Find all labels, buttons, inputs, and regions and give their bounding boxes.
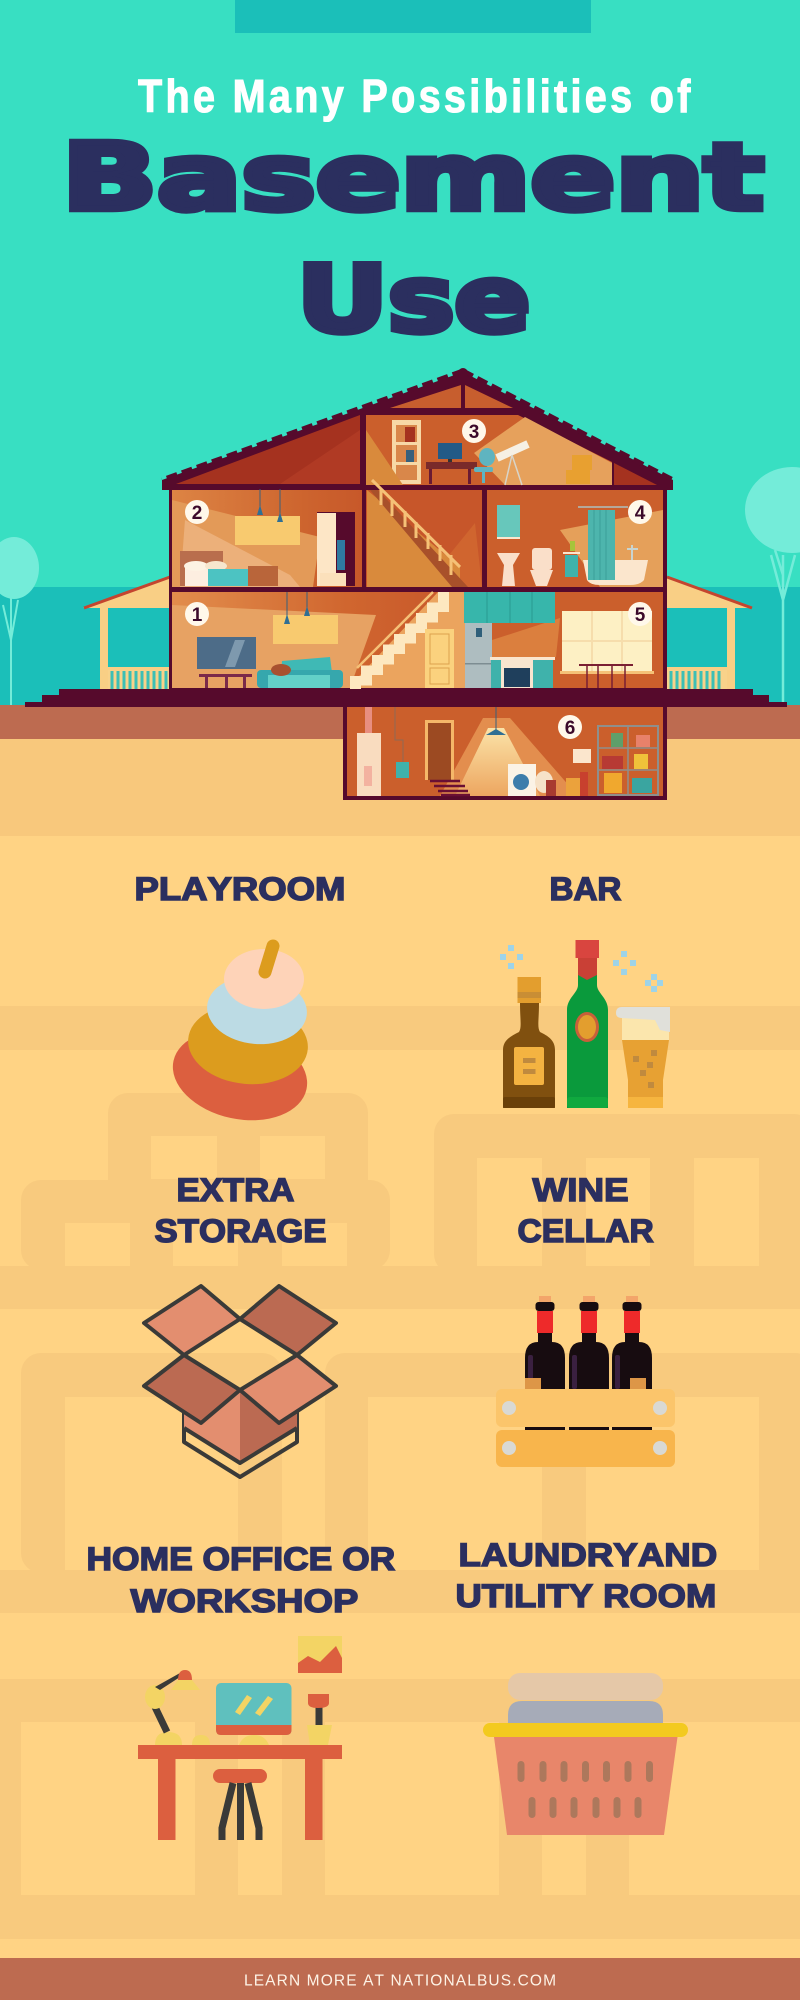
desk lamp [145,1670,200,1745]
stool [213,1769,267,1840]
water horizon [0,587,800,707]
wall picture [235,516,300,545]
ground strip [0,705,800,739]
section: home office or workshop [86,1542,395,1840]
number badge 4: 4 [635,503,646,524]
window [560,611,654,674]
porch left [83,577,170,689]
heading: WINE [532,1173,629,1208]
section: wine cellar [496,1173,675,1467]
desk and monitor [426,443,477,484]
wall picture [273,615,338,644]
number badge 6 [558,715,582,739]
icon: laundry basket [483,1673,688,1835]
title word: Use: Use [297,247,530,353]
heading: CELLAR [518,1213,654,1249]
top accent bar [235,0,591,33]
green bottle [567,940,608,1108]
counter and oven [490,657,555,688]
number badge 5 [628,602,652,626]
title [62,71,764,353]
desk [138,1745,342,1840]
heading: UTILITY ROOM [456,1579,716,1614]
sky background [0,0,800,707]
footer text: LEARN MORE AT NATIONALBUS.COM [244,1972,556,1990]
heading [86,1542,395,1619]
attic stair corner [366,430,403,485]
small cup [192,1735,210,1745]
toilet [530,548,553,586]
section: extra storage [144,1173,336,1477]
footer [0,1958,800,2000]
bottle 2 [569,1296,609,1430]
washer [508,764,536,796]
dining table [579,664,633,688]
section: playroom [134,872,345,1132]
foundation steps [25,689,787,707]
number badge 1 [185,602,209,626]
icon: open cardboard box [144,1286,336,1477]
bottle 1 [525,1296,565,1430]
chair [474,448,495,483]
tv [197,637,256,669]
tree left [0,537,39,708]
hanging lamps [287,592,307,623]
number badge 2: 2 [192,503,202,524]
heading: BAR [550,871,621,907]
house cutaway illustration [25,368,787,800]
icon: bottles and beer [500,940,670,1108]
water tank, box and extinguisher [535,771,588,796]
door [425,720,454,780]
telescope [497,444,528,485]
icon: desk, lamp, laptop and stool [138,1636,342,1840]
laptop [216,1683,292,1745]
number badge 3: 3 [469,422,479,443]
background building pattern [0,836,800,1958]
room 3: attic office [366,415,657,485]
sand layer [0,739,800,836]
bottle 3 [612,1296,652,1430]
heading: EXTRA [176,1173,294,1209]
heading: STORAGE [154,1214,326,1250]
shower curtain [578,506,628,580]
roof [162,368,673,490]
ceiling lamp [486,707,506,735]
hanging lamps [260,489,280,521]
wardrobe [317,512,355,586]
crate slats [496,1389,675,1427]
boxes [566,455,592,484]
fridge [465,623,492,688]
pencil pot [307,1694,332,1745]
house wall mass [169,485,667,692]
brown bottle [503,977,555,1108]
small picture [573,749,591,763]
door [425,629,454,688]
bathtub [583,545,648,585]
electric box [395,707,409,778]
stair carpet [430,781,470,795]
sink [497,553,520,586]
room 2: bedroom [172,489,362,587]
room 1: living room [172,592,463,696]
bed [180,551,250,586]
heading [456,1538,717,1614]
heading: LAUNDRYAND [458,1538,717,1573]
sofa [257,657,343,688]
number badge 3 [462,419,486,443]
bookcase [392,420,421,484]
heading: PLAYROOM [134,872,345,907]
room 5: kitchen [460,592,663,688]
number badge 2 [185,500,209,524]
beer glass [616,1007,670,1108]
number badge 5: 5 [635,605,646,626]
section: bar [500,871,670,1108]
number badge 6: 6 [565,718,575,739]
basement room 6 [343,705,667,800]
stair room [366,480,482,587]
icon: stacking rings toy [164,946,316,1132]
heading: HOME OFFICE OR [86,1542,395,1578]
heading: WORKSHOP [130,1584,358,1619]
tv table [199,674,252,688]
water heater [357,707,381,796]
porch right [667,577,752,689]
towel rack [563,541,580,577]
wall picture [298,1636,342,1673]
mirror [497,505,520,539]
number badge 4 [628,500,652,524]
icon: wine crate [496,1296,675,1467]
light beam [440,718,578,796]
tree right [745,467,800,702]
number badge 1: 1 [192,605,203,626]
subtitle line: The Many Possibilities of [138,71,694,123]
heading [154,1173,326,1250]
section: laundry and utility room [456,1538,717,1835]
wall cabinets [464,592,555,623]
heading [518,1173,654,1249]
stairs [350,592,449,696]
sparkles [500,945,663,992]
storage shelves [598,726,658,795]
room 4: bathroom [487,490,663,587]
title word: Basement: Basement [62,124,764,231]
nightstand [248,566,278,586]
